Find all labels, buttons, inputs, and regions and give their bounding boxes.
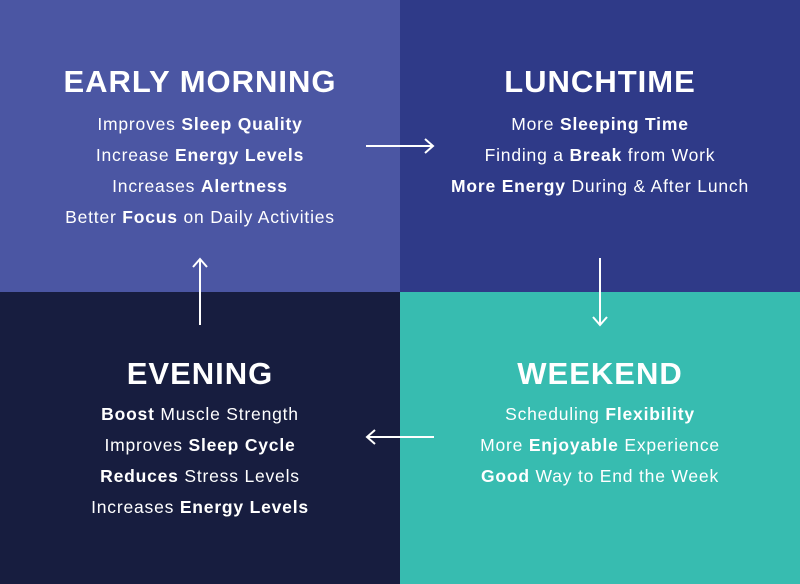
arrow: up xyxy=(193,259,207,325)
text: lunchtime benefits: More Energy During & After Lunch xyxy=(451,176,749,196)
text: evening benefits: Boost Muscle Strength xyxy=(101,404,299,424)
arrow: right xyxy=(366,139,433,153)
text: lunchtime benefits: Finding a Break from Work xyxy=(485,145,715,165)
text: lunchtime benefits: More Sleeping Time xyxy=(511,114,689,134)
arrow: left xyxy=(367,430,434,444)
heading: weekend: WEEKEND xyxy=(517,356,683,391)
text: early morning benefits: Increase Energy Levels xyxy=(96,145,304,165)
heading: lunchtime: LUNCHTIME xyxy=(504,64,696,99)
heading: evening: EVENING xyxy=(127,356,273,391)
arrow: down xyxy=(593,258,607,325)
text: weekend benefits xyxy=(480,404,720,486)
text: lunchtime benefits xyxy=(451,114,749,196)
panel: early morning xyxy=(0,0,400,292)
text: evening benefits: Reduces Stress Levels xyxy=(100,466,300,486)
text: early morning benefits xyxy=(65,114,335,227)
panel: weekend xyxy=(400,292,800,584)
text: evening benefits: Improves Sleep Cycle xyxy=(104,435,296,455)
panel: lunchtime xyxy=(400,0,800,292)
text: evening benefits: Increases Energy Levels xyxy=(91,497,309,517)
panel: evening xyxy=(0,292,400,584)
text: weekend benefits: More Enjoyable Experience xyxy=(480,435,720,455)
text: evening benefits xyxy=(91,404,309,517)
text: weekend benefits: Scheduling Flexibility xyxy=(505,404,695,424)
text: weekend benefits: Good Way to End the Week xyxy=(481,466,719,486)
text: early morning benefits: Increases Alertness xyxy=(112,176,288,196)
text: early morning benefits: Better Focus on Daily Activities xyxy=(65,207,335,227)
heading: early morning: EARLY MORNING xyxy=(63,64,337,99)
text: early morning benefits: Improves Sleep Quality xyxy=(97,114,303,134)
